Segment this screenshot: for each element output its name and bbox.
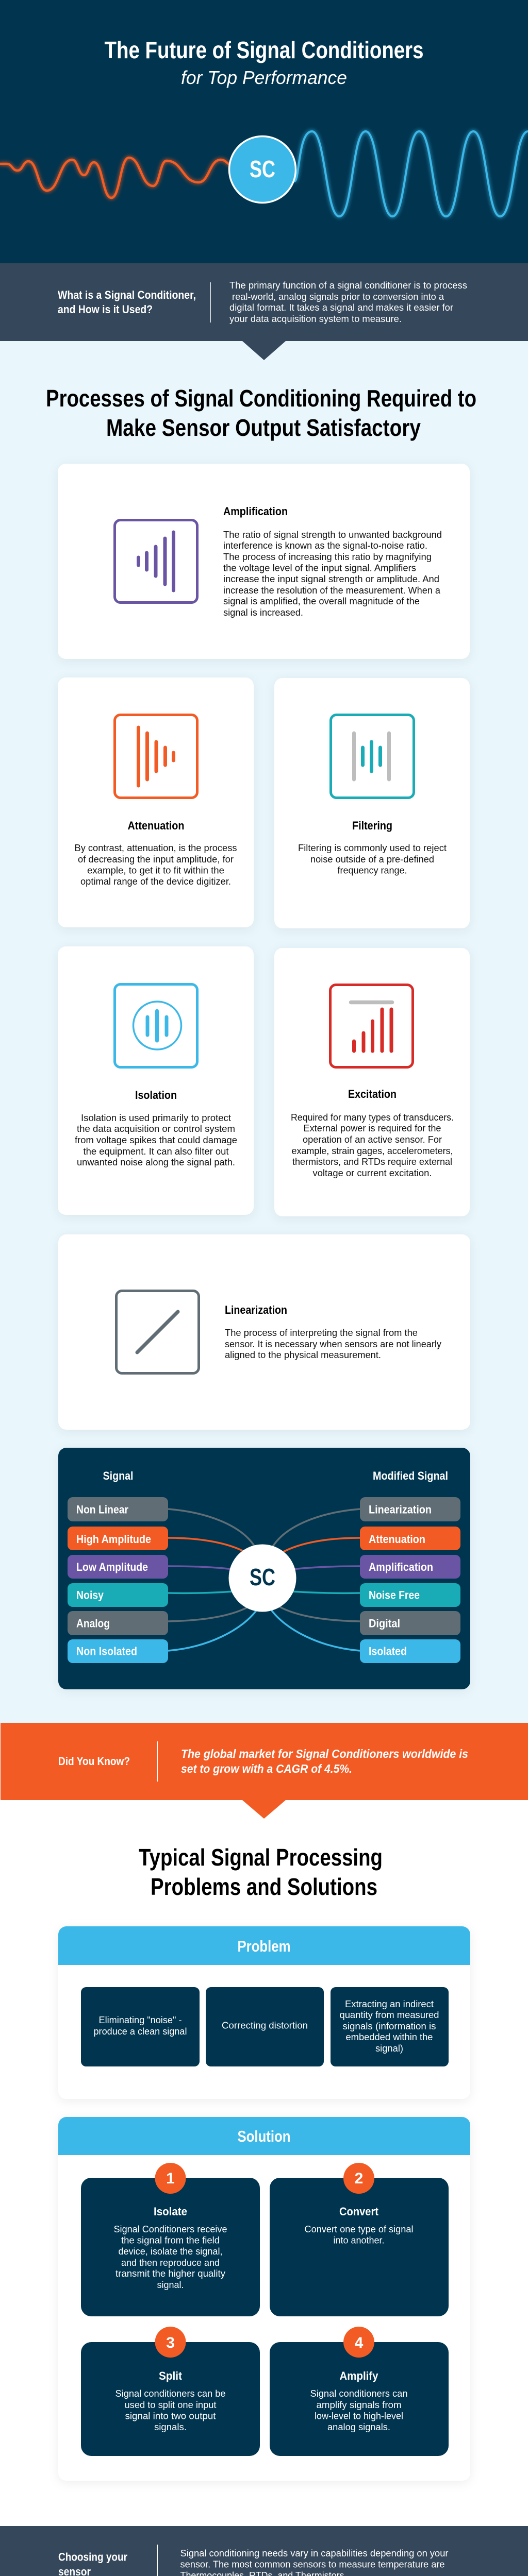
text: isolation: from voltage spikes that could damage: [75, 1135, 237, 1145]
icon: amplification: [114, 520, 197, 603]
callout fact: set to grow with a CAGR of 4.5%.: [181, 1762, 352, 1775]
text: amplification: [223, 530, 442, 618]
SC hub: [229, 1545, 296, 1612]
output pills: [360, 1497, 460, 1663]
SC circle: SC: [250, 156, 275, 182]
callout text: digital format. It takes a signal and makes it easier for: [229, 302, 453, 313]
input pills: Non Linear: [76, 1503, 128, 1516]
solution 1: isolate: [81, 2163, 260, 2316]
output pills: Attenuation: [369, 1533, 425, 1546]
callout fact: The global market for Signal Conditioners worldwide is: [181, 1747, 468, 1760]
solution 1: isolate: Isolate: [154, 2205, 187, 2218]
text: linearization: sensor. It is necessary when sensors are not linearly: [225, 1339, 441, 1349]
output pills: Linearization: [369, 1503, 432, 1516]
problem box 3: Extracting an indirect: [345, 1999, 434, 2009]
callout heading: What is a Signal Conditioner,: [58, 289, 196, 301]
solution 1: isolate: and then reproduce and: [121, 2258, 220, 2268]
callout heading: and How is it Used?: [58, 303, 153, 316]
input pills: Low Amplitude: [76, 1561, 148, 1573]
solution 2: convert: 2: [355, 2170, 363, 2187]
callout heading: Choosing your: [58, 2550, 127, 2564]
solution 3: split: Signal conditioners can be: [116, 2388, 226, 2399]
text: amplification: The process of increasing this ratio by magnifying: [223, 552, 432, 562]
panel header: [58, 1926, 470, 1965]
panel: linearization: [58, 1234, 470, 1430]
text: linearization: aligned to the physical measurement.: [225, 1350, 381, 1360]
solution 1: isolate: 1: [166, 2170, 175, 2187]
callout text: [180, 2548, 449, 2576]
solution 3: split: Split: [159, 2369, 183, 2382]
text: amplification: increase the resolution of the measurement. When a: [223, 585, 441, 596]
solution 2: convert: into another.: [333, 2235, 385, 2245]
text: excitation: Required for many types of transducers.: [291, 1112, 454, 1123]
icon: isolation: [114, 984, 197, 1067]
title: The Future of Signal Conditioners: [104, 37, 424, 63]
panel: signal to modified signal diagram: [58, 1448, 470, 1689]
column heading: signal: Signal: [103, 1469, 133, 1482]
solution 1: isolate: signal.: [157, 2280, 184, 2290]
callout heading: [58, 289, 196, 316]
heading: processes: [46, 385, 476, 441]
panel header: Solution: [237, 2127, 291, 2145]
input pills: High Amplitude: [76, 1533, 151, 1546]
solution 1: isolate: transmit the higher quality: [116, 2268, 225, 2279]
header: title block: [104, 37, 424, 88]
input pills: [68, 1497, 168, 1663]
problem box 3: signal): [375, 2043, 403, 2054]
text: excitation: [291, 1112, 454, 1178]
connector lines: [168, 1509, 360, 1651]
chart: signal wave through conditioner: [0, 131, 528, 216]
heading: processes: Make Sensor Output Satisfactory: [106, 414, 421, 441]
panel: isolation: [58, 946, 254, 1215]
text: filtering: [298, 843, 447, 876]
SC circle: [229, 136, 296, 203]
callout text: real-world, analog signals prior to conversion into a: [232, 292, 444, 302]
title: linearization: Linearization: [225, 1303, 287, 1316]
heading: problems and solutions: Problems and Solutions: [151, 1873, 377, 1900]
output pills: Noise Free: [369, 1589, 420, 1601]
text: amplification: signal is increased.: [223, 607, 303, 618]
solution 4: amplify: [270, 2327, 449, 2456]
callout text: sensor. The most common sensors to measure temperature are: [180, 2560, 444, 2570]
panel header: Problem: [237, 1937, 291, 1955]
text: excitation: example, strain gages, accelerometers,: [292, 1146, 453, 1156]
text: isolation: unwanted noise along the signal path.: [77, 1157, 235, 1167]
problem box 1: produce a clean signal: [94, 2026, 187, 2037]
solution 2: convert: Convert: [339, 2205, 379, 2218]
solution 3: split: used to split one input: [125, 2400, 217, 2410]
text: attenuation: optimal range of the device digitizer.: [80, 876, 231, 887]
solution 4: amplify: Amplify: [339, 2369, 378, 2382]
solution 3: split: [81, 2327, 260, 2456]
solution 4: amplify: analog signals.: [327, 2422, 390, 2432]
text: excitation: operation of an active sensor. For: [303, 1134, 442, 1145]
title: isolation: Isolation: [135, 1089, 177, 1101]
problem box 1: [81, 1987, 200, 2066]
problem box 1: Eliminating "noise" -: [99, 2015, 182, 2025]
solution 4: amplify: Signal conditioners can: [310, 2388, 407, 2399]
panel: problem: [58, 1926, 470, 2099]
callout: what is a signal conditioner: [0, 263, 528, 360]
output pills: Digital: [369, 1617, 400, 1630]
callout text: The primary function of a signal conditioner is to process: [229, 280, 467, 291]
orange input wave: [0, 158, 230, 198]
callout: did you know: [1, 1723, 528, 1819]
problem box 2: [206, 1987, 324, 2066]
solution 4: amplify: amplify signals from: [317, 2400, 401, 2410]
SC hub: SC: [250, 1564, 275, 1590]
solution 3: split: signals.: [154, 2422, 187, 2432]
text: amplification: signal is amplified, the overall magnitude of the: [223, 596, 420, 606]
output pills: Amplification: [369, 1561, 433, 1573]
text: excitation: External power is required for the: [303, 1123, 441, 1133]
heading: problems and solutions: [139, 1844, 383, 1900]
solution 2: convert: [270, 2163, 449, 2316]
text: attenuation: By contrast, attenuation, is the process: [74, 843, 237, 853]
solution 4: amplify: low-level to high-level: [315, 2411, 403, 2421]
text: excitation: voltage or current excitation.: [312, 1168, 432, 1178]
text: filtering: frequency range.: [337, 866, 407, 876]
text: filtering: Filtering is commonly used to reject: [298, 843, 447, 853]
panel: solution: [58, 2117, 470, 2481]
icon: linearization: [117, 1291, 199, 1374]
blue output wave: [294, 131, 528, 216]
panel: filtering: [274, 678, 470, 928]
text: amplification: The ratio of signal strength to unwanted background: [223, 530, 442, 540]
solution 4: amplify: 4: [355, 2334, 364, 2351]
text: attenuation: of decreasing the input amplitude, for: [78, 854, 234, 865]
text: linearization: The process of interpreting the signal from the: [225, 1328, 418, 1338]
problem box 3: [331, 1987, 449, 2066]
input pills: Noisy: [76, 1589, 104, 1601]
icon: excitation: [330, 985, 412, 1067]
problem box 2: Correcting distortion: [222, 2021, 308, 2031]
subtitle: for Top Performance: [181, 67, 347, 88]
column heading: modified signal: Modified Signal: [373, 1469, 448, 1482]
callout text: Signal conditioning needs vary in capabilities depending on your: [180, 2548, 449, 2558]
problem box 3: signals (information is: [342, 2021, 436, 2031]
callout text: your data acquisition system to measure.: [229, 314, 402, 324]
text: isolation: Isolation is used primarily to protect: [81, 1113, 231, 1123]
solution 2: convert: Convert one type of signal: [304, 2224, 414, 2234]
title: excitation: Excitation: [348, 1088, 397, 1100]
title: filtering: Filtering: [352, 819, 392, 832]
text: filtering: noise outside of a pre-defined: [310, 854, 434, 865]
callout heading: [58, 2550, 127, 2576]
text: excitation: thermistors, and RTDs require external: [292, 1157, 452, 1167]
callout label: Did You Know?: [58, 1755, 130, 1768]
panel: excitation: [274, 948, 470, 1216]
icon: filtering: [331, 715, 414, 798]
solution 1: isolate: device, isolate the signal,: [119, 2246, 223, 2257]
text: isolation: [75, 1113, 237, 1167]
panel header: [58, 2117, 470, 2155]
panel: attenuation: [58, 677, 254, 927]
solution 3: split: 3: [166, 2334, 175, 2351]
input pills: Non Isolated: [76, 1645, 137, 1658]
title: attenuation: Attenuation: [128, 819, 185, 832]
text: amplification: interference is known as the signal-to-noise ratio.: [223, 540, 427, 551]
solution 1: isolate: the signal from the field: [121, 2235, 220, 2245]
text: amplification: the voltage level of the input signal. Amplifiers: [223, 563, 416, 573]
callout fact: [181, 1747, 468, 1775]
callout: choosing your sensor: [0, 2526, 528, 2576]
input pills: Analog: [76, 1617, 110, 1630]
text: isolation: the equipment. It can also filter out: [84, 1146, 229, 1157]
text: attenuation: example, to get it to fit within the: [87, 866, 224, 876]
panel: amplification: [58, 464, 470, 659]
text: isolation: the data acquisition or control system: [77, 1124, 235, 1134]
problem box 3: embedded within the: [345, 2032, 433, 2042]
title: amplification: Amplification: [223, 505, 288, 518]
text: attenuation: [74, 843, 237, 887]
solution 1: isolate: Signal Conditioners receive: [113, 2224, 227, 2234]
heading: problems and solutions: Typical Signal Processing: [139, 1844, 383, 1871]
problem box 3: quantity from measured: [339, 2010, 439, 2020]
text: amplification: increase the input signal strength or amplitude. And: [223, 574, 439, 584]
callout text: [229, 280, 467, 324]
text: linearization: [225, 1328, 441, 1360]
output pills: Isolated: [369, 1645, 407, 1658]
solution 3: split: signal into two output: [125, 2411, 216, 2421]
icon: attenuation: [114, 715, 197, 798]
